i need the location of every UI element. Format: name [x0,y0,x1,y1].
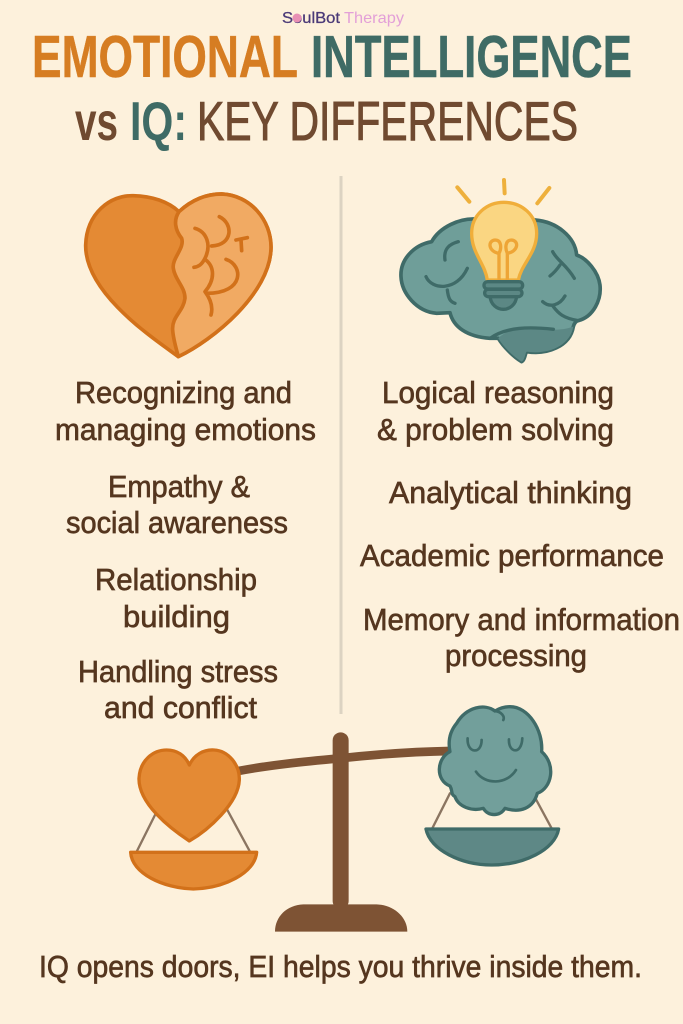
title [32,24,632,152]
list: emotional intelligence traits: managing emotions [55,413,316,447]
brand logo: Therapy [344,10,404,27]
list: IQ traits: & problem solving [377,413,614,447]
list: emotional intelligence traits: Empathy & [108,470,250,504]
brand logo: SoulBot [282,10,341,27]
list: emotional intelligence traits: and conflict [104,691,258,725]
brand logo [282,10,404,27]
list: emotional intelligence traits: building [123,600,230,634]
title: IQ: [130,90,187,152]
list: IQ traits: Memory and information [363,603,680,637]
list: IQ traits [360,376,680,673]
balance scale [131,707,559,932]
list: IQ traits: Analytical thinking [389,476,632,510]
icon: heart with brain [86,194,271,357]
list: IQ traits: Academic performance [360,539,664,573]
title: EMOTIONAL [32,24,298,90]
list: IQ traits: processing [445,639,587,673]
title: vs [75,92,118,152]
icon: brain with lightbulb [401,180,600,362]
list: emotional intelligence traits [55,376,316,725]
closing tagline: IQ opens doors, EI helps you thrive inside them. [39,950,642,984]
list: IQ traits: Logical reasoning [382,376,614,410]
list: emotional intelligence traits: social awareness [66,506,288,540]
list: emotional intelligence traits: Recognizing and [75,376,292,410]
list: emotional intelligence traits: Handling stress [78,655,278,689]
list: emotional intelligence traits: Relationship [95,563,257,597]
